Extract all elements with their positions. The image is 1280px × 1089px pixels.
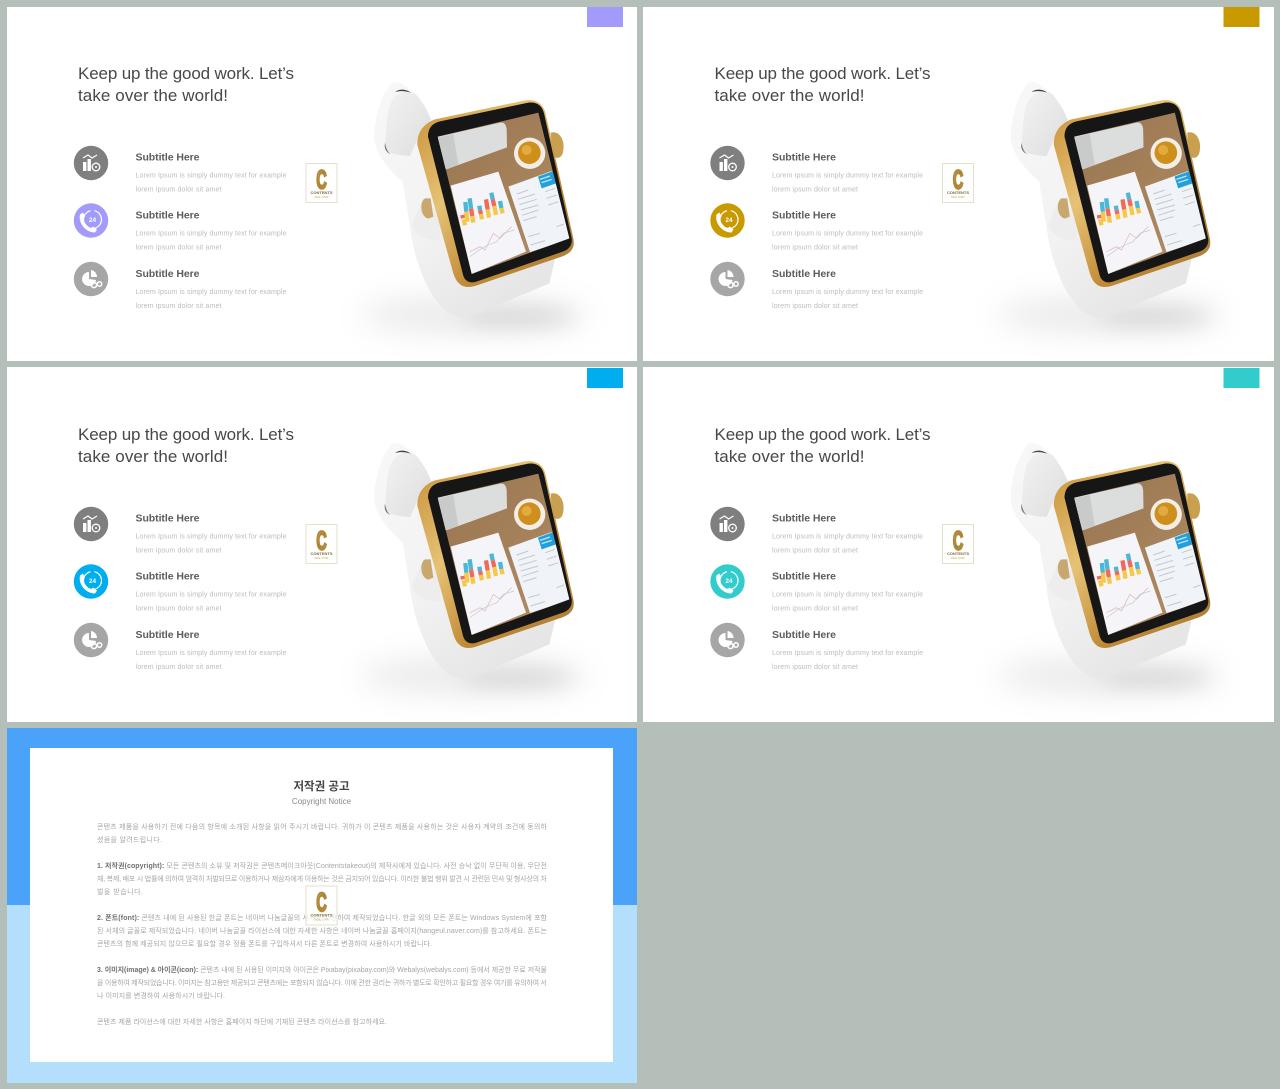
item 1: [710, 146, 923, 194]
heading: Keep up the good work. Let’s: [78, 64, 294, 83]
notice title: 저작권 공고: [293, 779, 350, 793]
logo: CONTENTS: [947, 190, 969, 195]
logo: CONTENTS: [310, 912, 333, 918]
item 1: lorem ipsum dolor sit amet: [136, 186, 222, 194]
item 3: Subtitle Here: [772, 629, 836, 641]
item 3: lorem ipsum dolor sit amet: [772, 664, 858, 671]
item 1: Lorem Ipsum is simply dummy text for example: [136, 172, 287, 180]
item 3: [74, 623, 287, 671]
logo: REAL CORP: [315, 918, 329, 922]
watch illustration: [360, 82, 587, 333]
item 2: lorem ipsum dolor sit amet: [772, 606, 858, 612]
heading: Keep up the good work. Let’s: [714, 425, 930, 444]
logo: [942, 164, 974, 202]
corner tab: [1224, 368, 1260, 388]
logo: CONTENTS: [947, 551, 969, 556]
logo: REAL CORP: [315, 196, 329, 199]
notice body: 을 이용하여 제작되었습니다. 이미지는 참고용만 제공되고 콘텐츠에는 포함되지 않습니다. 이에 관한 권리는 귀하가 별도로 확인하고 필요할 경우 여기를 유의하여 서: [97, 978, 547, 987]
item 2: lorem ipsum dolor sit amet: [772, 244, 858, 252]
panel: slide 2 gold: [643, 7, 1274, 361]
notice body: 나 이미지를 변경하여 사용하시기 바랍니다.: [97, 991, 225, 1000]
item 2: lorem ipsum dolor sit amet: [136, 244, 222, 252]
panel: slide 1 purple: [7, 7, 637, 361]
item 1: Subtitle Here: [772, 152, 836, 164]
notice body: [97, 822, 548, 1026]
heading: [714, 64, 930, 105]
notice body: 콘텐츠의 함께 제공되지 않으므로 필요할 경우 정품 폰트를 구입하셔서 다른 폰트로 변경하여 사용하시기 바랍니다.: [97, 939, 432, 948]
notice body: 셨음을 알려드립니다.: [97, 835, 162, 844]
item 2: Subtitle Here: [136, 570, 200, 582]
item 1: Lorem Ipsum is simply dummy text for example: [136, 534, 287, 540]
logo: [306, 164, 337, 202]
notice subtitle: Copyright Notice: [292, 797, 352, 806]
heading: take over the world!: [714, 447, 864, 466]
heading: [78, 425, 294, 466]
notice body: 콘텐츠 제품을 사용하기 전에 다음의 항목에 소개된 사항을 읽어 주시기 바랍니다. 귀하가 이 콘텐츠 제품을 사용하는 것은 사용자 계약의 조건에 동의하: [97, 822, 548, 831]
item 1: [74, 146, 287, 194]
item 1: Subtitle Here: [136, 512, 200, 524]
heading: [714, 425, 930, 466]
logo: C: [316, 527, 327, 556]
item 1: Subtitle Here: [136, 152, 200, 164]
item 3: Lorem Ipsum is simply dummy text for example: [772, 650, 923, 657]
item 1: Subtitle Here: [772, 512, 836, 524]
item 2: 24: [89, 578, 96, 585]
logo: C: [316, 166, 327, 195]
logo: [306, 886, 337, 925]
item 3: [74, 262, 287, 310]
notice body: 된 서체의 글꼴로 제작되었습니다. 네이버 나눔글꼴 라이선스에 대한 자세한 사항은 네이버 나눔글꼴 홈페이지(hangeul.naver.com)를 참고하세요. 폰트는: [97, 926, 548, 935]
item 1: lorem ipsum dolor sit amet: [772, 548, 858, 554]
item 3: lorem ipsum dolor sit amet: [136, 303, 222, 310]
item 2: Lorem Ipsum is simply dummy text for example: [772, 230, 923, 238]
logo: REAL CORP: [315, 557, 329, 560]
logo: CONTENTS: [310, 551, 333, 556]
heading: Keep up the good work. Let’s: [714, 64, 930, 83]
notice body: 콘텐츠 제품 라이선스에 대한 자세한 사항은 홈페이지 하단에 기재된 콘텐츠 라이선스를 참고하세요.: [97, 1017, 387, 1026]
notice body: 1. 저작권(copyright): 모든 콘텐츠의 소유 및 저작권은 콘텐츠메이크아웃(Contentstakeout)의 제작사에게 있습니다. 사전 승낙 없이 무단적 이용, 무단전: [97, 861, 547, 870]
notice body: 3. 이미지(image) & 아이콘(icon): 콘텐츠 내에 된 사용된 이미지와 아이콘은 Pixabay(pixabay.com)와 Webalys(webalys.com) 등에서 제공한 무료 저작물: [97, 965, 548, 974]
watch illustration: [996, 82, 1223, 333]
panel: slide 3 blue: [7, 367, 637, 722]
item 3: [710, 623, 923, 671]
item 1: lorem ipsum dolor sit amet: [772, 186, 858, 194]
item 1: [710, 507, 923, 554]
notice body: 벌을 받습니다.: [97, 887, 143, 896]
item 2: 24: [725, 578, 733, 585]
item 1: Lorem Ipsum is simply dummy text for example: [772, 172, 923, 180]
item 1: lorem ipsum dolor sit amet: [136, 548, 222, 554]
item 2: [710, 564, 923, 612]
item 2: 24: [89, 217, 96, 224]
panel: slide 4 teal: [643, 367, 1274, 722]
logo: REAL CORP: [951, 196, 965, 199]
notice body: 재, 복제, 배포 시 법률에 의하여 엄격히 처벌되므로 이용하거나 제삼자에게 이용하는 것은 금지되어 있습니다. 이러한 불법 행위 발견 시 관련된 민사 및 형사상의 처: [97, 874, 547, 883]
item 3: Subtitle Here: [772, 268, 836, 280]
item 3: lorem ipsum dolor sit amet: [136, 664, 222, 671]
item 3: Subtitle Here: [136, 268, 200, 280]
notice body: 2. 폰트(font): 콘텐츠 내에 된 사용된 한글 폰트는 네이버 나눔글꼴의 서체를 사용하여 제작되었습니다. 한글 외의 모든 폰트는 Windows System에 포함: [97, 913, 548, 922]
logo: [306, 524, 337, 564]
item 1: Lorem Ipsum is simply dummy text for example: [772, 534, 923, 540]
item 2: lorem ipsum dolor sit amet: [136, 606, 222, 612]
item 3: Lorem Ipsum is simply dummy text for example: [136, 289, 287, 296]
item 3: Lorem Ipsum is simply dummy text for example: [136, 650, 287, 657]
item 2: Lorem Ipsum is simply dummy text for example: [772, 592, 923, 598]
panel: copyright notice: [7, 728, 637, 1083]
item 2: [74, 203, 287, 252]
item 2: [74, 564, 287, 612]
logo: [942, 524, 974, 564]
item 3: Subtitle Here: [136, 629, 200, 641]
logo: CONTENTS: [310, 190, 333, 195]
item 2: Lorem Ipsum is simply dummy text for example: [136, 230, 287, 238]
item 2: [710, 203, 923, 252]
item 2: Lorem Ipsum is simply dummy text for example: [136, 592, 287, 598]
item 3: lorem ipsum dolor sit amet: [772, 303, 858, 310]
item 3: Lorem Ipsum is simply dummy text for example: [772, 289, 923, 296]
heading: [78, 64, 294, 105]
corner tab: [1224, 7, 1260, 27]
logo: C: [953, 166, 963, 195]
item 2: Subtitle Here: [772, 210, 836, 222]
logo: REAL CORP: [951, 557, 965, 560]
heading: take over the world!: [78, 447, 228, 466]
item 2: 24: [725, 217, 733, 224]
item 1: [74, 507, 287, 554]
corner tab: [587, 7, 623, 27]
logo: C: [316, 889, 327, 917]
item 2: Subtitle Here: [772, 570, 836, 582]
logo: C: [953, 527, 963, 556]
heading: Keep up the good work. Let’s: [78, 425, 294, 444]
item 2: Subtitle Here: [136, 210, 200, 222]
item 3: [710, 262, 923, 310]
heading: take over the world!: [78, 86, 228, 105]
corner tab: [587, 368, 623, 388]
watch illustration: [996, 443, 1223, 694]
heading: take over the world!: [714, 86, 864, 105]
watch illustration: [360, 443, 587, 694]
